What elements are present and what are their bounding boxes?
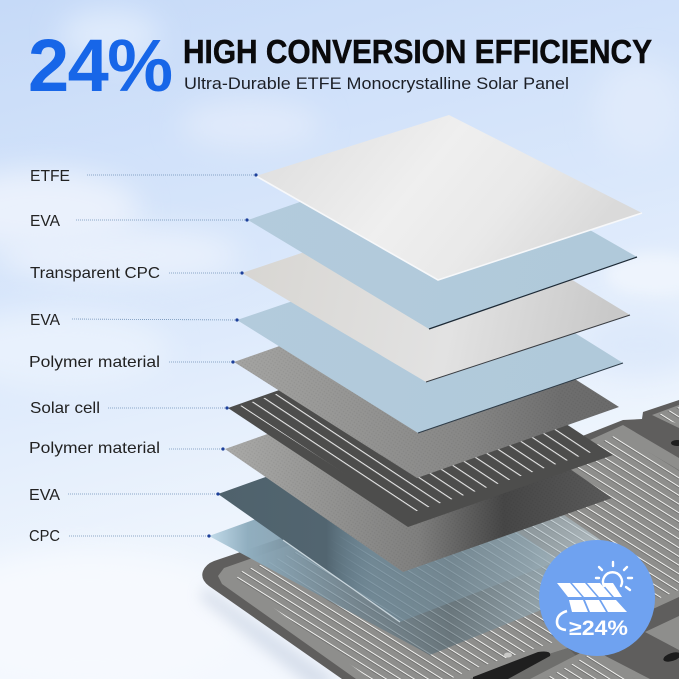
callout: Polymer material 2 [29,440,225,457]
callout: EVA 1: EVA [30,213,60,230]
callout: EVA 2: EVA [30,312,60,329]
layer: polymer material lower [225,375,612,572]
layer: ETFE [256,115,642,280]
layer: EVA upper [237,250,623,433]
big figure: 24%: 24% [28,24,173,107]
layer: polymer material upper [234,291,619,478]
icon: sun [596,562,632,590]
layer: EVA lower [218,420,605,622]
base folding solar panel [202,400,679,679]
callout: EVA 3: EVA [29,487,60,504]
callout: Transparent CPC [30,265,244,282]
callout: ETFE: ETFE [30,168,70,185]
badge text: ≥24% [569,617,628,640]
callout: Transparent CPC: Transparent CPC [30,265,160,282]
layer: transparent CPC [242,204,630,382]
callout: ETFE [30,168,258,185]
badge: 24 percent efficiency icon [539,540,655,656]
callout: EVA 1 [30,213,249,230]
icon: solar panel [557,583,627,612]
callout: EVA 3 [29,487,220,504]
callout: Polymer material 2: Polymer material [29,440,160,457]
icon: arc arrow [557,611,567,630]
layer: solar cell [228,336,613,527]
subtitle: Ultra-Durable ETFE Monocrystalline Solar Panel [184,75,569,93]
callout: Polymer material 1 [29,354,235,371]
callout: CPC: CPC [29,528,60,545]
callout: Solar cell [30,400,229,417]
callout: Solar cell: Solar cell [30,400,100,417]
layer: EVA top [248,150,637,329]
callout: Polymer material 1: Polymer material [29,354,160,371]
callout: CPC [29,528,211,545]
base shadow [200,586,340,679]
layer: CPC [209,462,598,655]
callout: EVA 2 [30,312,239,329]
